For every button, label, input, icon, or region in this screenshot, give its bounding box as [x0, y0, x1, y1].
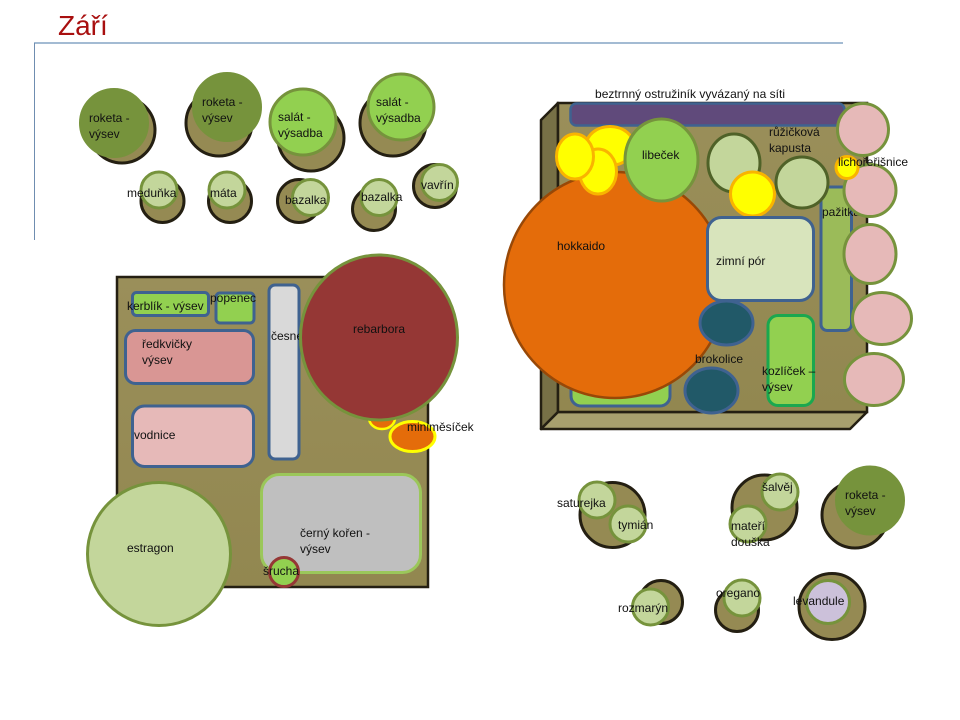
plant: růžičková kapusta: růžičková — [769, 125, 820, 139]
plant: brokolice — [685, 301, 753, 413]
plant: šrucha: šrucha — [263, 564, 299, 578]
pot: máta: máta — [210, 186, 237, 200]
bed: ostružiník: beztrnný ostružiník vyvázaný na síti — [595, 87, 785, 101]
bed: ředkvičky: výsev — [142, 353, 173, 367]
bed: kozlíček — [762, 316, 816, 406]
pot: saturejka and tymián: saturejka — [557, 496, 606, 510]
panel: left raised bed — [88, 255, 475, 626]
plants: yellow group — [556, 126, 634, 194]
plants: pink row — [838, 104, 912, 406]
bed: kozlíček: kozlíček – — [762, 364, 816, 378]
pot: roketa 1: výsev — [89, 127, 120, 141]
plant: lichořeřišnice — [836, 155, 908, 178]
bed: zimní pór — [708, 218, 814, 300]
bed: ředkvičky — [126, 330, 254, 384]
pot: bazalka 1: bazalka — [285, 193, 327, 207]
bed: černý kořen: výsev — [300, 542, 331, 556]
pot: roketa 2 — [186, 72, 262, 156]
pot: salát 2: salát - — [376, 95, 409, 109]
plant: hokkaido — [504, 172, 726, 398]
pot: roketa 3 — [822, 466, 904, 548]
pot: rozmarýn: rozmarýn — [618, 601, 668, 615]
pot: meduňka: meduňka — [127, 186, 177, 200]
plant: miniměsíček: miniměsíček — [407, 420, 475, 434]
panel: top row of pots — [80, 72, 458, 230]
pot: bazalka 2 — [352, 180, 403, 230]
plant: rebarbora: rebarbora — [353, 322, 405, 336]
bed: kozlíček: výsev — [762, 380, 793, 394]
bed soil — [117, 277, 428, 587]
plant: libeček — [625, 119, 698, 201]
plant: šrucha — [263, 558, 299, 586]
plant: miniměsíček small — [369, 407, 395, 429]
pot: šalvěj and mateří douška — [730, 474, 798, 549]
pot: roketa 2: výsev — [202, 111, 233, 125]
plant: růžičková kapusta — [769, 125, 828, 208]
bed: green hidden under hokkaido — [571, 350, 670, 406]
bed soil — [558, 103, 867, 412]
plant: pažitka — [821, 187, 860, 330]
pot: vavřín — [414, 164, 458, 208]
plant: lichořeřišnice: lichořeřišnice — [838, 155, 908, 169]
pot: saturejka and tymián — [557, 482, 653, 548]
pot: salát 1: salát - — [278, 110, 311, 124]
pot: roketa 1 — [80, 88, 155, 163]
plant: brokolice: brokolice — [695, 352, 743, 366]
plant: růžičková kapusta: kapusta — [769, 141, 811, 155]
bed: česnek: česnek — [271, 329, 310, 343]
pot: roketa 3: roketa - — [845, 488, 886, 502]
bed: vodnice: vodnice — [134, 428, 176, 442]
bed: černý kořen — [262, 474, 420, 572]
pot: salát 2: výsadba — [376, 111, 421, 125]
pot: bazalka 1 — [278, 180, 328, 222]
plant: estragon: estragon — [127, 541, 174, 555]
plant: libeček: libeček — [642, 148, 680, 162]
bed side faces — [541, 103, 867, 429]
pot: šalvěj and mateří douška: douška — [731, 535, 770, 549]
bed: popenec: popenec — [210, 291, 256, 305]
plant: rebarbora — [300, 255, 458, 420]
plant: hokkaido: hokkaido — [557, 239, 605, 253]
pot: salát 1: výsadba — [278, 126, 323, 140]
bed: popenec — [210, 291, 256, 323]
pot: salát 1 — [270, 89, 344, 171]
pot: šalvěj and mateří douška: mateří — [731, 519, 766, 533]
bed: česnek — [269, 285, 310, 459]
pot: roketa 1: roketa - — [89, 111, 130, 125]
title: Září — [58, 10, 108, 41]
plant: yellow flower — [730, 172, 774, 216]
bed: ředkvičky: ředkvičky — [142, 337, 192, 351]
pot: levandule — [793, 574, 865, 640]
pot: levandule: levandule — [793, 594, 845, 608]
plant: pažitka: pažitka — [822, 205, 860, 219]
pot: saturejka and tymián: tymián — [618, 518, 653, 532]
bed: kerblík: kerblík - výsev — [127, 299, 204, 313]
bed: ostružiník — [570, 87, 844, 126]
pot: roketa 3: výsev — [845, 504, 876, 518]
bed: zimní pór: zimní pór — [716, 254, 765, 268]
pot: šalvěj and mateří douška: šalvěj — [762, 480, 793, 494]
pot: máta — [208, 172, 252, 222]
pot: oregano: oregano — [716, 586, 760, 600]
plant: estragon — [88, 482, 230, 626]
plant: miniměsíček — [390, 420, 475, 452]
pot: rozmarýn — [618, 580, 682, 625]
pot: vavřín: vavřín — [421, 178, 454, 192]
pot: roketa 2: roketa - — [202, 95, 243, 109]
panel: right raised bed — [504, 87, 912, 429]
bed: kerblík — [127, 292, 208, 316]
pot: bazalka 2: bazalka — [361, 190, 403, 204]
pot: oregano — [716, 580, 760, 632]
pot: meduňka — [127, 172, 184, 222]
bed: černý kořen: černý kořen - — [300, 526, 370, 540]
bed: vodnice — [132, 406, 254, 466]
plant: cabbage 1 — [708, 134, 760, 192]
pot: salát 2 — [360, 74, 434, 156]
panel: bottom pots — [557, 466, 904, 640]
